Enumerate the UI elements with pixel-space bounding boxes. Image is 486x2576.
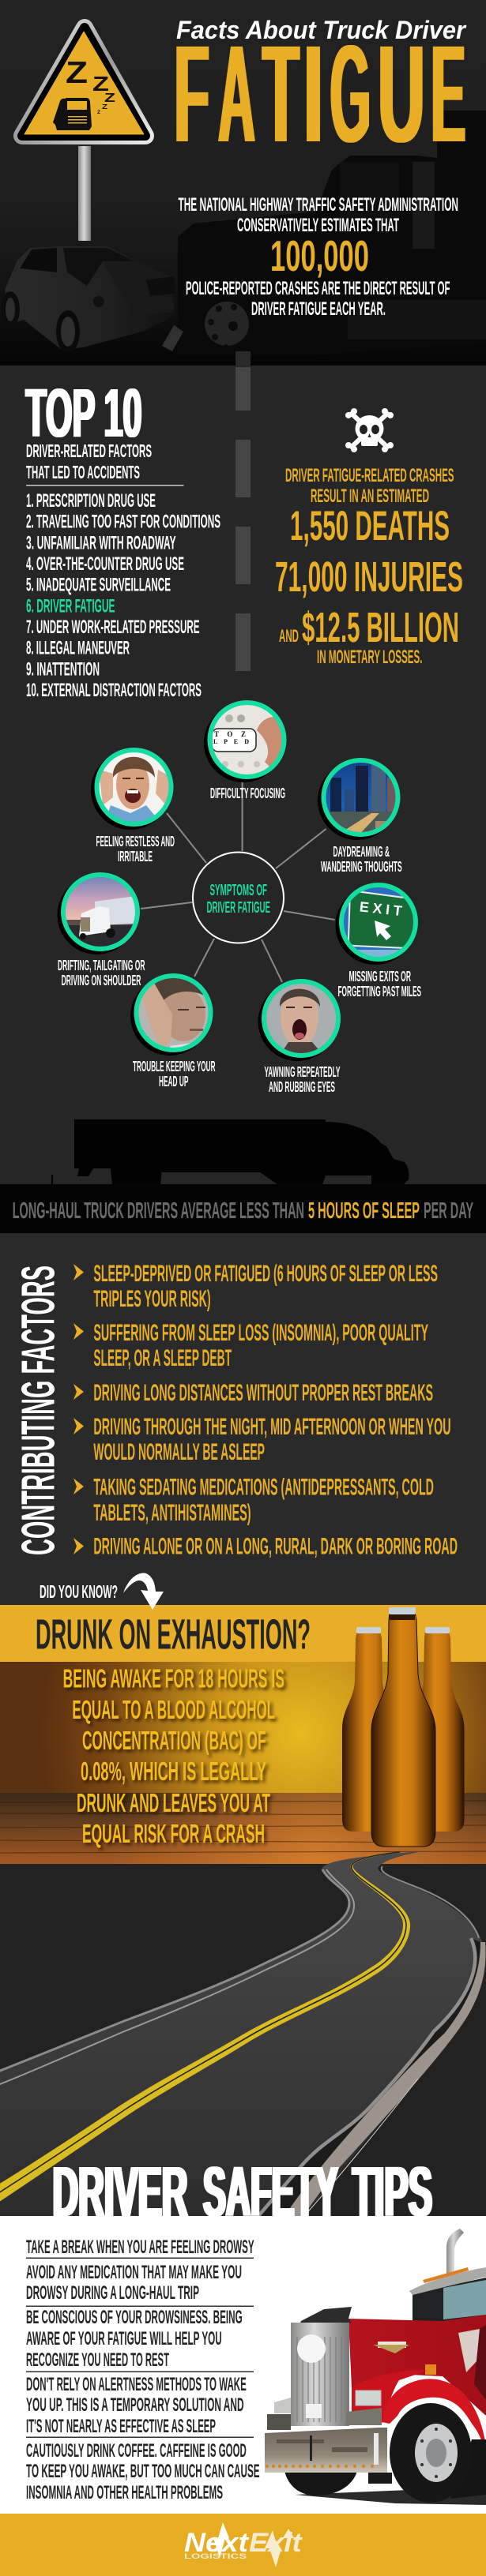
bumper lights [266,2465,374,2468]
title: fatigue: A [218,14,255,172]
icon: warning sign post [78,146,91,241]
road yellow double line [0,1852,410,2207]
marker light [425,2364,436,2375]
label: missing exits: MISSING EXITS OR [349,969,411,984]
panel: symptoms of driver fatigue: FEELING RESTLESS AND [96,834,175,849]
icon: beer bottles [342,1607,465,1847]
road right shoulder lines [258,1866,486,2216]
photo: crashed truck [162,111,486,355]
text block: crashes result [285,465,454,507]
list: contributing factors: SLEEP, OR A SLEEP DEBT [93,1345,232,1371]
symptom: feeling restless [91,748,174,830]
symptom: yawning [258,978,341,1061]
panel: contributing factors: CONTRIBUTING FACTORS [13,1266,65,1555]
label: yawning [264,1064,340,1095]
tip: coffee [26,2440,260,2503]
tip: coffee: INSOMNIA AND OTHER HEALTH PROBLEMS [26,2482,223,2503]
arrow: did you know [123,1573,164,1610]
icon: warning sign with sleeping truck [22,28,145,136]
logo: NextExit Logistics: Exit [249,2528,303,2558]
grille [291,2323,349,2426]
heading: driver safety tips: SAFETY [203,2153,337,2232]
panel: safety tips [0,2216,486,2514]
text block: intro statistic [179,194,458,320]
text block: BAC comparison: CONCENTRATION (BAC) OF [82,1726,266,1755]
panel: safety tips: AVOID ANY MEDICATION THAT MAY MAKE YOU [26,2262,242,2283]
subheading: DRIVER-RELATED FACTORS [26,441,152,461]
panel: symptoms of driver fatigue: DRIVING ON SHOULDER [62,973,141,988]
stat: monetary losses [279,604,459,668]
left tire [284,2471,357,2495]
panel: top 10 factors [25,375,220,701]
tip: alertness methods: YOU UP. THIS IS A TEMPORARY SOLUTION AND [26,2394,244,2416]
panel: symptoms of driver fatigue: TROUBLE KEEPING YOUR [133,1059,215,1074]
tip: alertness methods [26,2374,247,2437]
text block: BAC comparison: EQUAL TO A BLOOD ALCOHOL [72,1695,275,1724]
logo: NextExit Logistics [184,2522,303,2567]
panel: winding road [0,1851,486,2232]
center circle: SYMPTOMS OF [210,882,267,899]
logo: NextExit Logistics: Next [184,2528,250,2558]
hood [348,2315,486,2416]
connector spokes [141,778,335,982]
stat: monetary losses: AND [279,626,299,646]
list: ten factors: 1. PRESCRIPTION DRUG USE [26,490,156,512]
icon: warning sign with sleeping truck: Z [66,56,88,90]
side chrome [458,2329,480,2372]
text block: BAC comparison: EQUAL RISK FOR A CRASH [82,1819,265,1848]
icon: bullet arrows [73,1264,84,1554]
grille top visor [296,2307,352,2330]
panel: footer [0,2514,486,2576]
center circle: DRIVER FATIGUE [207,899,270,917]
panel: symptoms of driver fatigue: DRIFTING, TAILGATING OR [58,958,145,973]
emblem [373,2342,409,2353]
label: feeling restless: IRRITABLE [118,849,153,864]
symptom: difficulty focusing [204,700,288,782]
panel: top 10 factors: TOP 10 [25,375,142,452]
panel: safety tips: DON'T RELY ON ALERTNESS METHODS TO WAKE [26,2374,247,2395]
wood floor [0,1793,486,1864]
list: ten factors: 4. OVER-THE-COUNTER DRUG USE [26,553,184,575]
front wheel [368,2403,486,2503]
title: fatigue: F [174,14,209,172]
panel: drunk on exhaustion [0,1605,486,1864]
icon: truck in sign [53,98,92,130]
list: ten factors: 7. UNDER WORK-RELATED PRESSURE [26,617,199,638]
road left shoulder lines [0,1869,354,2086]
list: contributing factors [93,1261,458,1560]
list: ten factors: 6. DRIVER FATIGUE [26,595,115,617]
list: ten factors: 8. ILLEGAL MANEUVER [26,638,130,659]
title: fatigue: T [262,14,300,172]
symptom: difficulty focusing: T O Z [214,730,246,738]
tip: avoid medication [26,2262,242,2304]
logo: NextExit Logistics: LOGISTICS [184,2552,247,2560]
list: contributing factors: TABLETS, ANTIHISTAMINES) [93,1500,251,1526]
text block: intro statistic: 100,000 [270,231,369,280]
label: trouble keeping head up: HEAD UP [159,1074,188,1089]
road surface [0,1851,485,2216]
exhaust stack [446,2229,464,2274]
symptom: trouble keeping head up [130,973,214,1058]
panel: crash totals [275,408,463,668]
icon: warning sign with sleeping truck: Z [104,92,115,105]
headlight [356,2390,381,2405]
symptom: daydreaming [318,757,401,840]
symptom: missing exits: EXIT [359,898,403,919]
label: missing exits [338,969,421,999]
panel: symptoms of driver fatigue: AND RUBBING EYES [269,1079,335,1095]
heading: driver safety tips: DRIVER [52,2153,188,2232]
cab [413,2278,486,2325]
photo: crashed car [1,246,176,353]
tip: be conscious: AWARE OF YOUR FATIGUE WILL HELP YOU [26,2328,222,2349]
list: ten factors: 5. INADEQUATE SURVEILLANCE [26,575,171,596]
panel: contributing factors [0,1233,486,1605]
wall background [0,1662,486,1793]
label: daydreaming: DAYDREAMING & [333,844,390,860]
tip: coffee: CAUTIOUSLY DRINK COFFEE. CAFFEINE IS GOOD [26,2440,247,2462]
symptom: missing exits [335,882,419,965]
fender [352,2370,427,2424]
icon: skull and crossbones [345,408,394,452]
text block: BAC comparison [63,1664,284,1848]
tip: be conscious: RECOGNIZE YOU NEED TO REST [26,2349,169,2371]
list: ten factors: 10. EXTERNAL DISTRACTION FACTORS [26,680,202,701]
text block: BAC comparison: DRUNK AND LEAVES YOU AT [77,1788,270,1817]
icon: warning sign with sleeping truck: Z [102,103,107,111]
band: yellow heading [0,1605,486,1662]
panel: safety tips: TAKE A BREAK WHEN YOU ARE FEELING DROWSY [26,2237,254,2258]
title: fatigue: U [378,14,425,172]
list: ten factors: 9. INATTENTION [26,658,100,680]
icon: warning sign with sleeping truck: Z [97,111,100,115]
road center dashes [235,351,251,671]
panel: symptoms of driver fatigue: YAWNING REPEATEDLY [264,1064,340,1080]
bumper [265,2428,387,2473]
banner: hours of sleep [0,1184,486,1233]
title: fatigue: G [330,14,371,172]
photo: red truck [265,2229,486,2505]
left headlight and chrome [267,2398,291,2430]
text: 2. TRAVELING TOO FAST FOR CONDITIONS [26,512,220,533]
panel: symptoms of driver fatigue: DIFFICULTY FOCUSING [210,786,285,801]
list: contributing factors: TRIPLES YOUR RISK) [93,1286,211,1312]
label: feeling restless [96,834,175,864]
center circle [193,853,284,943]
text block: BAC comparison: 0.08%, WHICH IS LEGALLY [81,1757,266,1786]
panel: safety tips: BE CONSCIOUS OF YOUR DROWSINESS. BEING [26,2307,243,2328]
tip: avoid medication: DROWSY DURING A LONG-HAUL TRIP [26,2282,199,2304]
icon: truck silhouette [51,1119,409,1185]
tip: be conscious [26,2307,243,2371]
truck shadow [295,2487,486,2505]
title: fatigue: I [303,14,323,172]
subheading [26,441,152,482]
label: trouble keeping head up [133,1059,215,1089]
text: did you know: DID YOU KNOW? [40,1581,118,1602]
panel: header [0,0,486,366]
panel: symptoms of driver fatigue [57,700,421,1095]
symptom: difficulty focusing: L P E D [213,738,249,745]
symptom: drifting truck [57,872,141,954]
icon: warning sign with sleeping truck: Z [92,72,109,96]
label: daydreaming [321,844,402,875]
subheading: THAT LED TO ACCIDENTS [26,462,140,482]
text block: BAC comparison: BEING AWAKE FOR 18 HOURS IS [63,1664,284,1693]
list: contributing factors: WOULD NORMALLY BE ASLEEP [93,1439,265,1465]
tip: alertness methods: IT'S NOT NEARLY AS EFFECTIVE AS SLEEP [26,2416,216,2437]
list: ten factors: 3. UNFAMILIAR WITH ROADWAY [26,532,176,553]
label: drifting [58,958,145,988]
title: facts about truck driver: Facts About Truck Driver [176,16,466,44]
list: ten factors [26,490,220,701]
